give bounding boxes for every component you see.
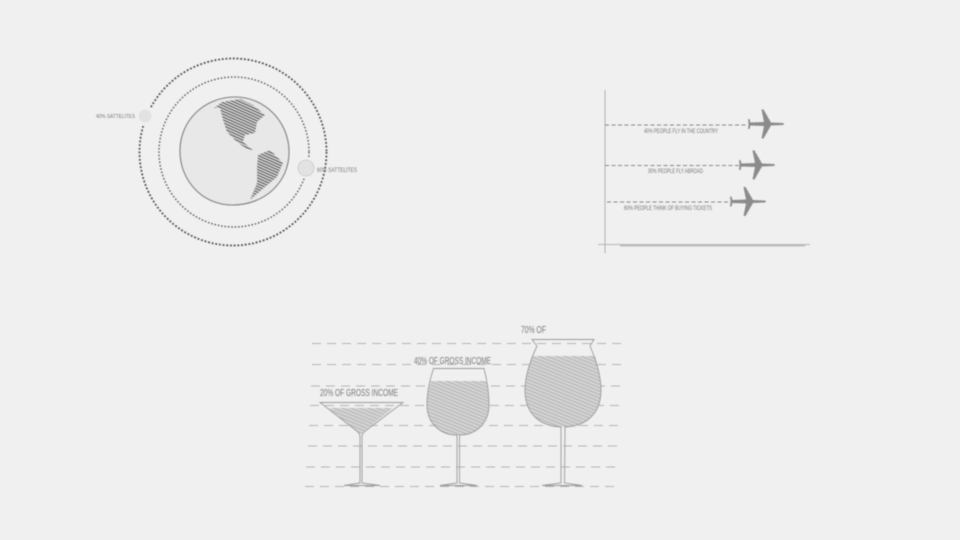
earth globe	[180, 97, 289, 205]
flight path 2	[605, 164, 739, 166]
label: 40 percent: 40% OF GROSS INCOME	[414, 355, 491, 367]
right satellite	[296, 158, 316, 178]
plane 1	[748, 110, 784, 138]
flight path 1	[605, 124, 747, 126]
flight path 3	[607, 201, 730, 203]
panel: air travel chart	[598, 90, 810, 253]
outer dotted orbit	[140, 58, 326, 246]
label: flying abroad: 30% PEOPLE FLY ABROAD	[648, 169, 703, 175]
plane 3	[730, 187, 766, 216]
north america	[214, 99, 265, 150]
label: 20 percent: 20% OF GROSS INCOME	[320, 387, 398, 399]
label: 70 percent: 70% OF	[521, 324, 546, 336]
label: right satellite: 60% SATTELITES	[317, 168, 357, 174]
panel: satellites orbiting earth	[96, 58, 357, 246]
panel: wine glasses income chart	[305, 324, 622, 486]
vertical axis	[604, 90, 606, 253]
glass 1: 20 percent	[320, 402, 403, 486]
label: left satellite: 40% SATTELITES	[96, 114, 135, 120]
south america	[250, 150, 283, 200]
dashed gridlines	[305, 344, 622, 486]
horizontal axis	[598, 244, 810, 246]
label: flying in the country: 40% PEOPLE FLY IN THE COUNTRY	[644, 129, 718, 135]
inner dotted orbit	[159, 77, 309, 227]
label: thinking of buying tickets: 60% PEOPLE THINK OF BUYING TICKETS	[624, 206, 712, 212]
left satellite	[136, 107, 154, 125]
glass 3: 70 percent	[525, 340, 601, 486]
plane 2	[739, 150, 775, 180]
glass 2: 40 percent	[427, 368, 489, 486]
